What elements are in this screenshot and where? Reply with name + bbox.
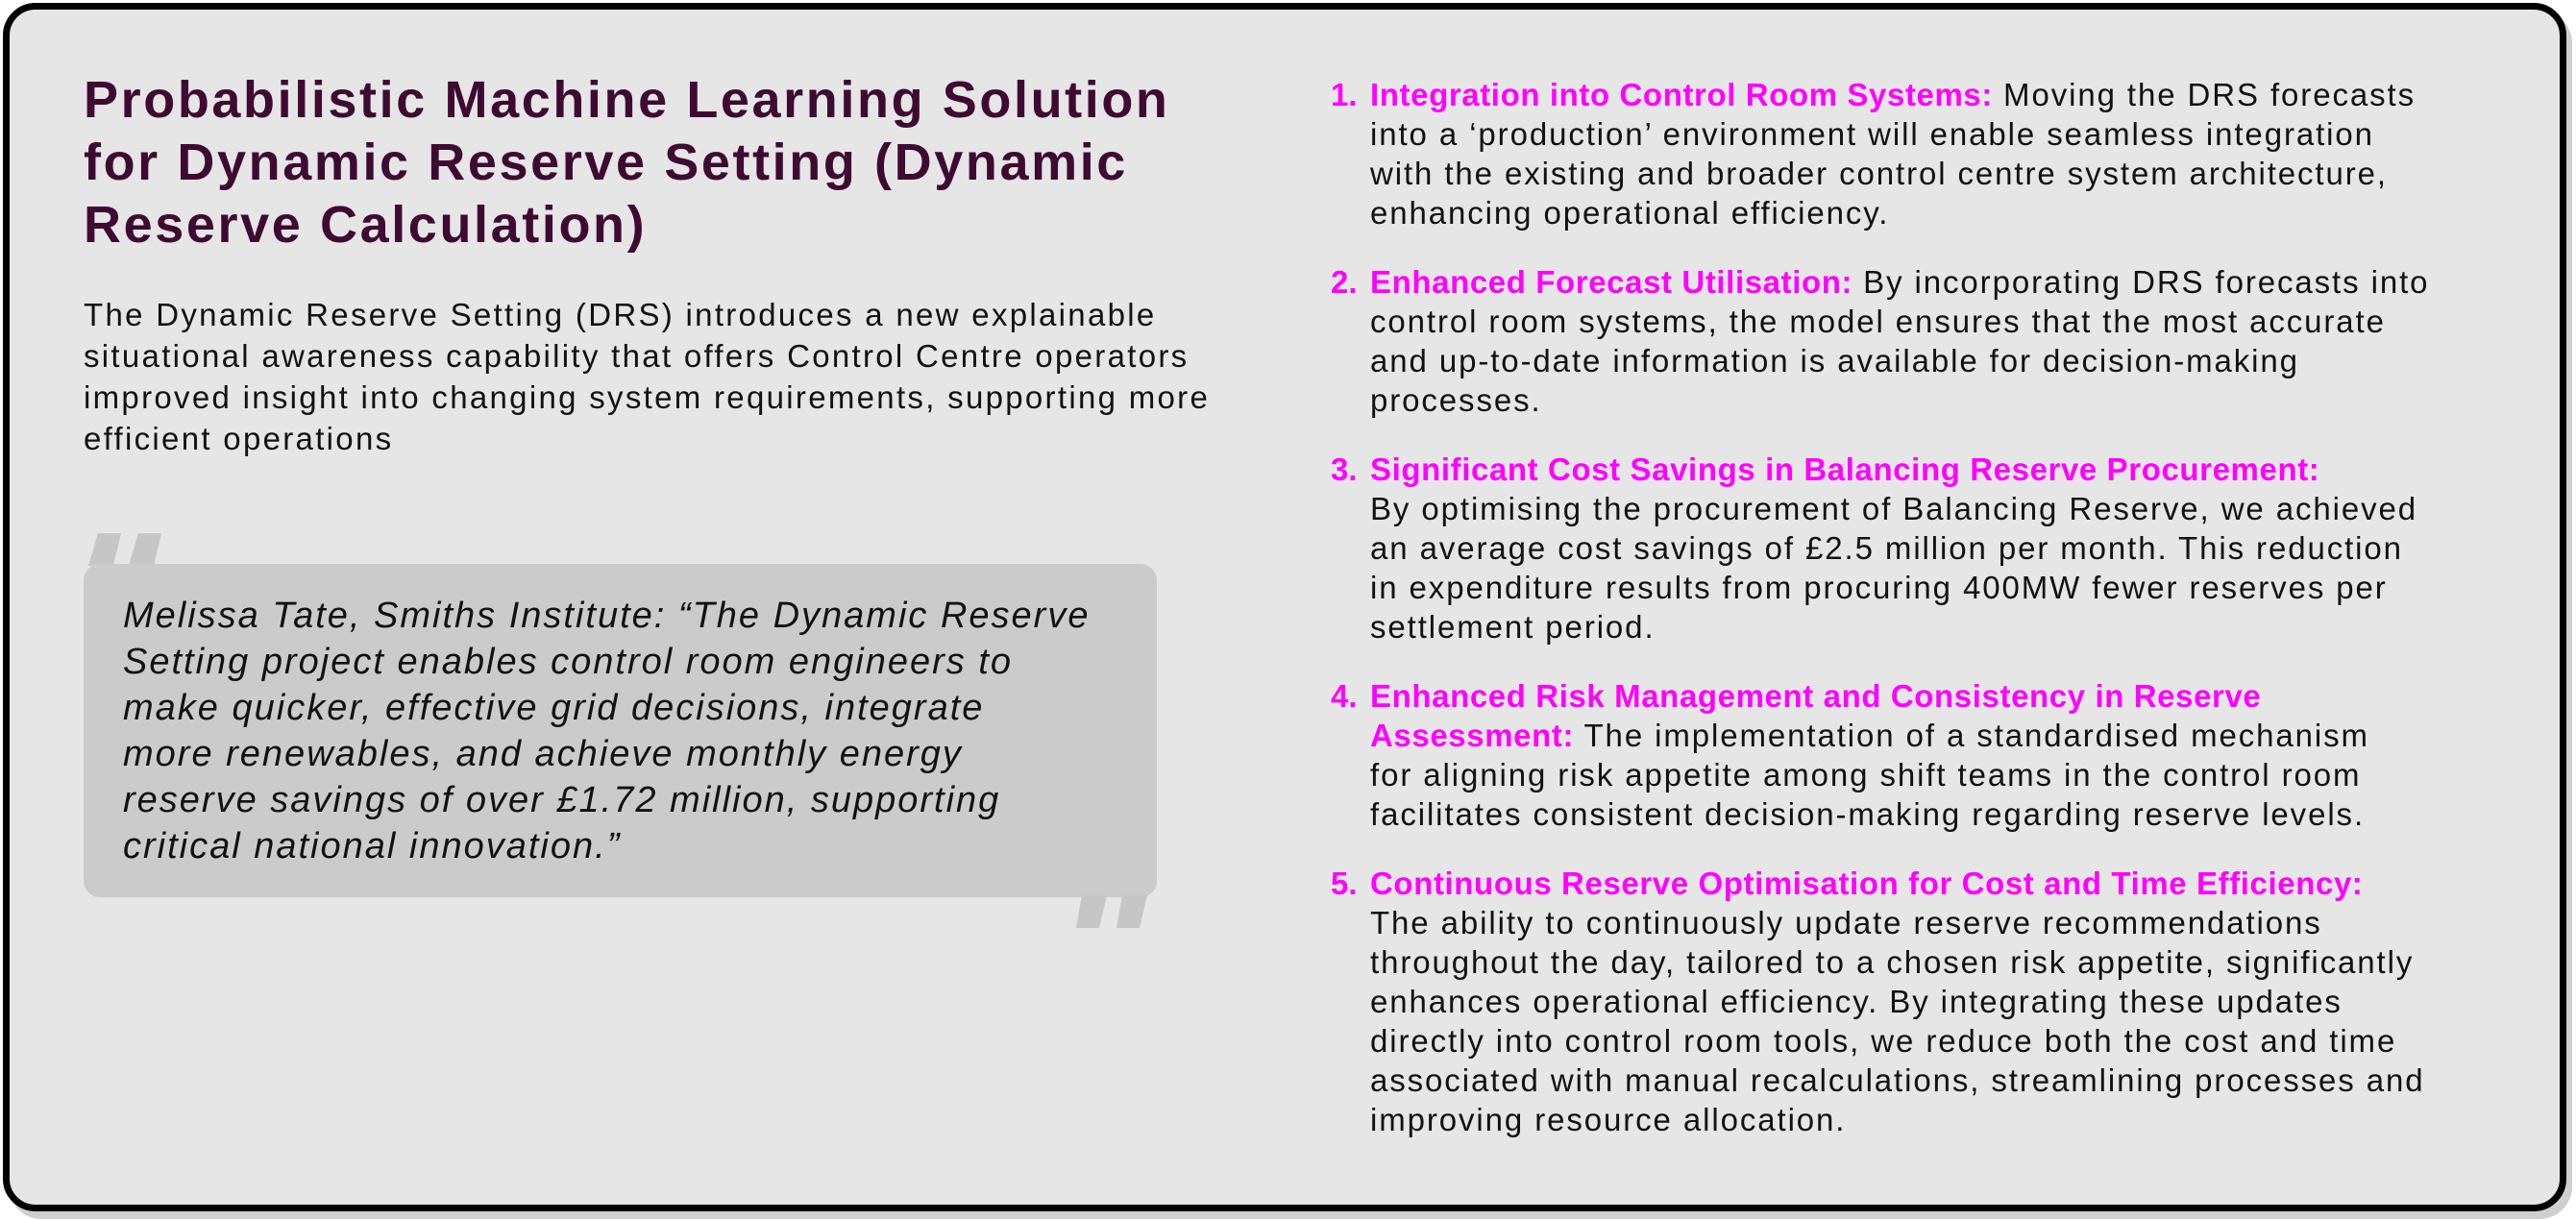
icon: opening quote marks [88,533,161,566]
item 5: associated with manual recalculations, streamlining processes and [1370,1062,2425,1098]
icon: closing quote marks [1076,895,1147,928]
quote text: make quicker, effective grid decisions, integrate [123,688,984,728]
item 4: facilitates consistent decision-making regarding reserve levels. [1370,796,2365,832]
text block: intro: The Dynamic Reserve Setting (DRS) introduces a new explainable [84,297,1157,332]
item 3: 3. [1331,451,1358,487]
title: Reserve Calculation) [84,196,647,254]
quote text: reserve savings of over £1.72 million, supporting [123,780,1000,820]
text block: intro: efficient operations [84,421,393,456]
item 3: Significant Cost Savings in Balancing Reserve Procurement: [1370,451,2319,487]
title: for Dynamic Reserve Setting (Dynamic [84,134,1128,191]
quote text: critical national innovation.” [123,826,621,866]
quote text: Melissa Tate, Smiths Institute: “The Dynamic Reserve [123,596,1090,636]
item 5: throughout the day, tailored to a chosen risk appetite, significantly [1370,944,2414,980]
item 1 [1331,77,2416,231]
item 2: Enhanced Forecast Utilisation: By incorporating DRS forecasts into [1370,264,2429,300]
item 4: Assessment: The implementation of a standardised mechanism [1370,718,2369,753]
quote text: more renewables, and achieve monthly energy [123,734,963,774]
item 5: directly into control room tools, we reduce both the cost and time [1370,1023,2396,1059]
item 5: Continuous Reserve Optimisation for Cost and Time Efficiency: [1370,866,2363,901]
callout: quote box [84,564,1157,897]
title: Probabilistic Machine Learning Solution [84,71,1170,129]
text block: intro [84,297,1210,456]
item 3: settlement period. [1370,609,1656,645]
item 4: 4. [1331,678,1358,714]
item 5 [1331,866,2425,1137]
item 1: with the existing and broader control centre system architecture, [1370,156,2388,191]
item 2: processes. [1370,382,1542,418]
item 1: Integration into Control Room Systems: Moving the DRS forecasts [1370,77,2416,112]
list: benefits [1331,77,2429,1137]
item 3: By optimising the procurement of Balancing Reserve, we achieved [1370,491,2417,526]
item 4: for aligning risk appetite among shift teams in the control room [1370,757,2361,793]
item 5: enhances operational efficiency. By integrating these updates [1370,984,2343,1019]
item 2 [1331,264,2429,418]
item 1: enhancing operational efficiency. [1370,195,1889,231]
quote text: Setting project enables control room engineers to [123,642,1013,682]
item 3: an average cost savings of £2.5 million per month. This reduction [1370,530,2403,566]
item 4 [1331,678,2369,832]
text block: intro: improved insight into changing system requirements, supporting more [84,379,1210,415]
item 2: 2. [1331,264,1358,300]
item 4: Enhanced Risk Management and Consistency in Reserve [1370,678,2261,714]
item 3 [1331,451,2417,645]
item 3: in expenditure results from procuring 400MW fewer reserves per [1370,570,2388,605]
item 5: The ability to continuously update reserve recommendations [1370,905,2322,940]
quote text [123,596,1090,866]
item 5: 5. [1331,866,1358,901]
item 2: and up-to-date information is available for decision-making [1370,343,2299,378]
text block: intro: situational awareness capability that offers Control Centre operators [84,338,1189,374]
item 1: 1. [1331,77,1358,112]
item 1: into a ‘production’ environment will enable seamless integration [1370,116,2374,152]
item 2: control room systems, the model ensures that the most accurate [1370,304,2386,339]
title [84,71,1170,254]
item 5: improving resource allocation. [1370,1102,1846,1137]
